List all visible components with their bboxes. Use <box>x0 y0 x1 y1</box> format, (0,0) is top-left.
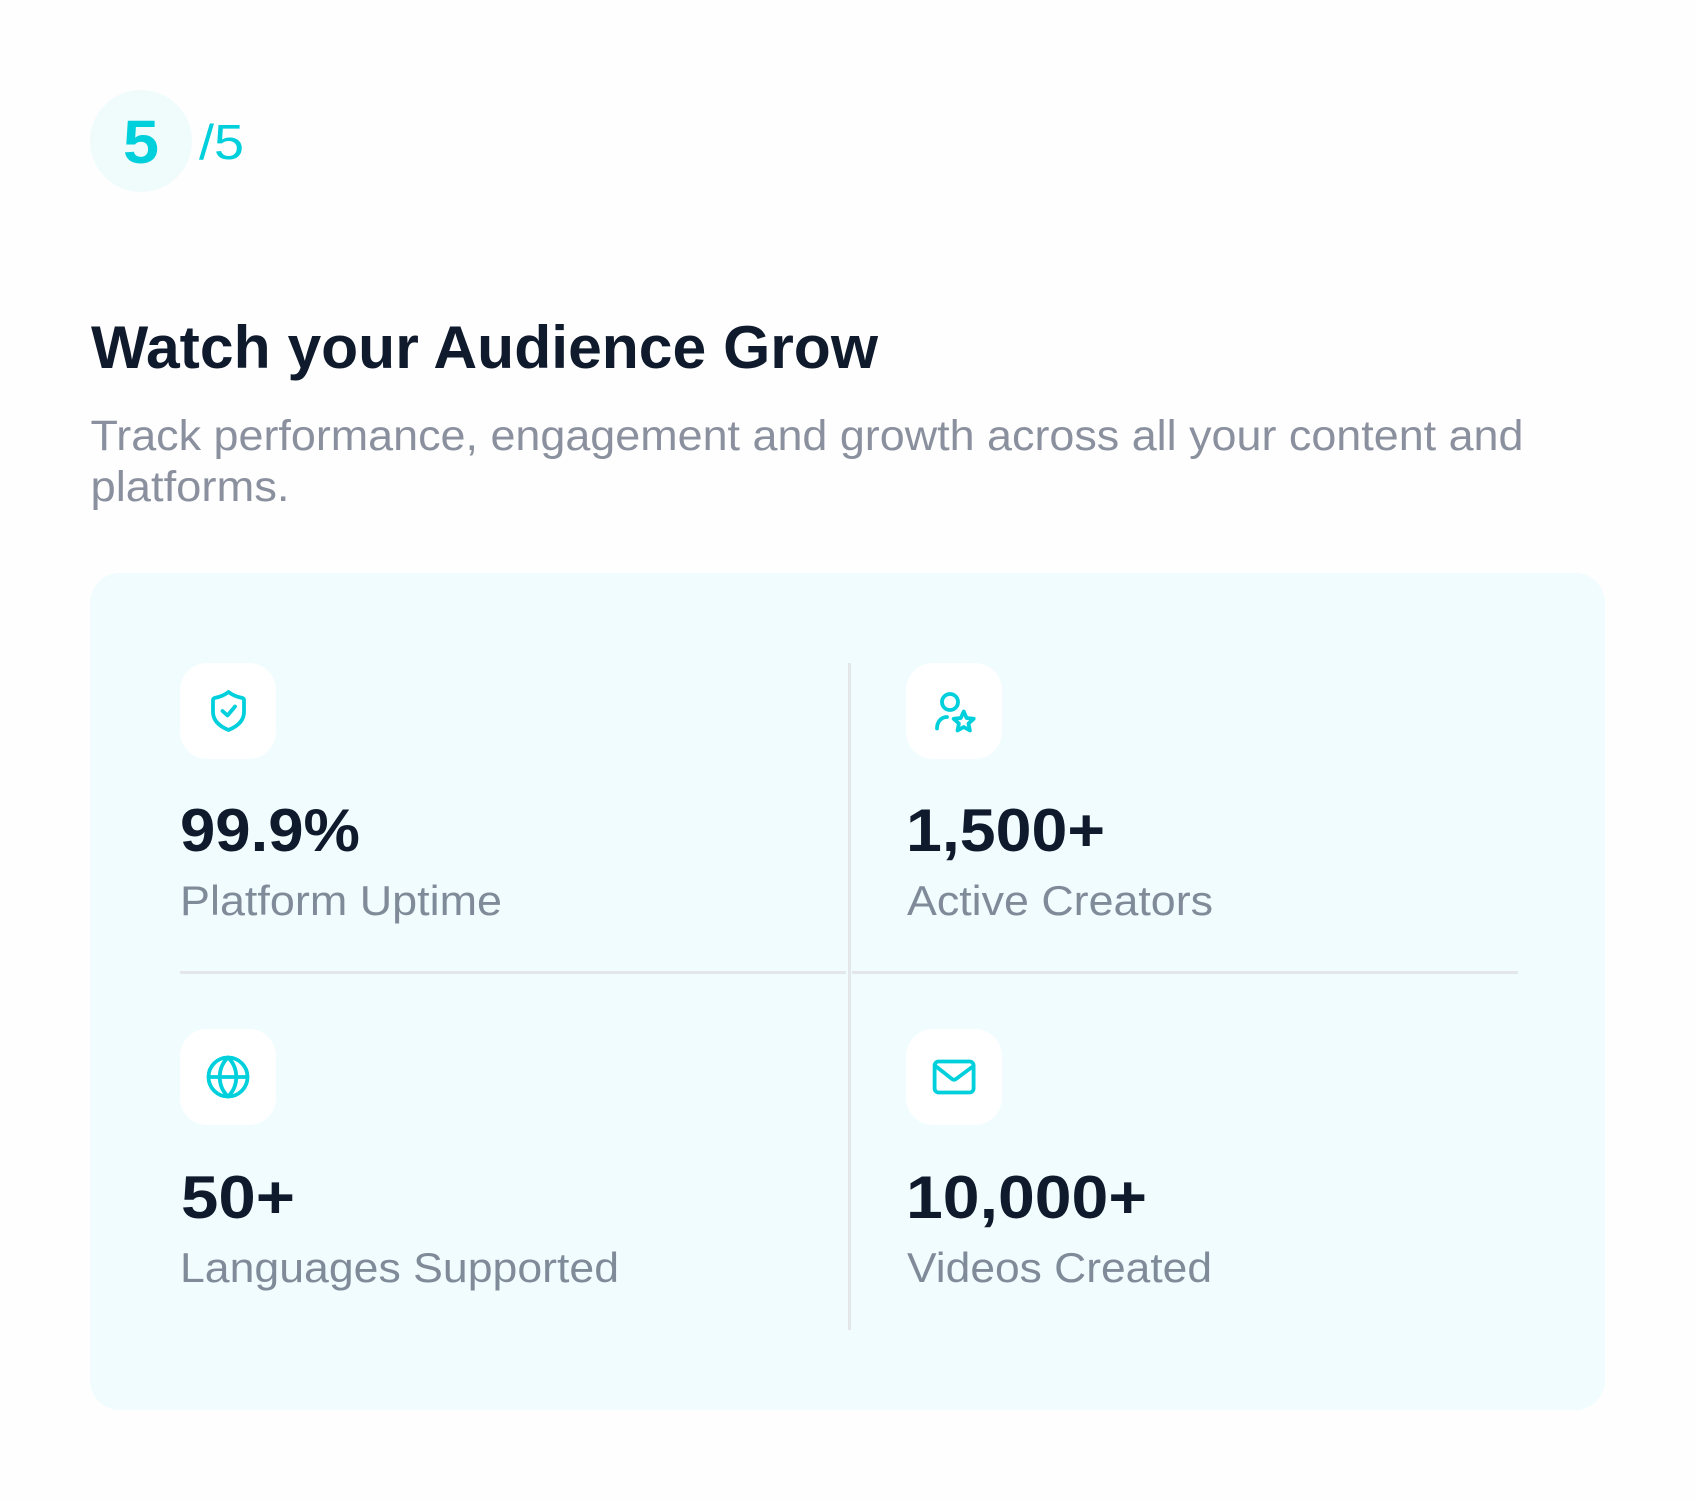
label: Platform Uptime <box>180 877 502 924</box>
title: Watch your Audience Grow <box>91 314 878 381</box>
step badge: /5 <box>199 116 244 170</box>
panel: stats <box>90 573 1605 1410</box>
description: Track performance, engagement and growth across all your content and <box>90 412 1524 460</box>
value: 99.9% <box>180 797 360 864</box>
value: 1,500+ <box>906 797 1105 864</box>
value: 50+ <box>181 1164 295 1231</box>
label: Languages Supported <box>180 1244 619 1291</box>
stat: languages supported <box>180 1029 619 1291</box>
stat: platform uptime <box>180 663 502 924</box>
label: Active Creators <box>907 877 1213 924</box>
stat: videos created <box>906 1029 1212 1291</box>
icon: envelope <box>906 1029 1002 1125</box>
step badge: 5 <box>123 108 159 176</box>
value: 10,000+ <box>906 1164 1147 1231</box>
stat: active creators <box>906 663 1213 924</box>
icon: globe <box>180 1029 276 1125</box>
label: Videos Created <box>907 1244 1212 1291</box>
icon: shield check <box>180 663 276 759</box>
step badge <box>90 90 244 192</box>
description <box>90 412 1524 511</box>
description: platforms. <box>90 463 290 511</box>
icon: user star <box>906 663 1002 759</box>
